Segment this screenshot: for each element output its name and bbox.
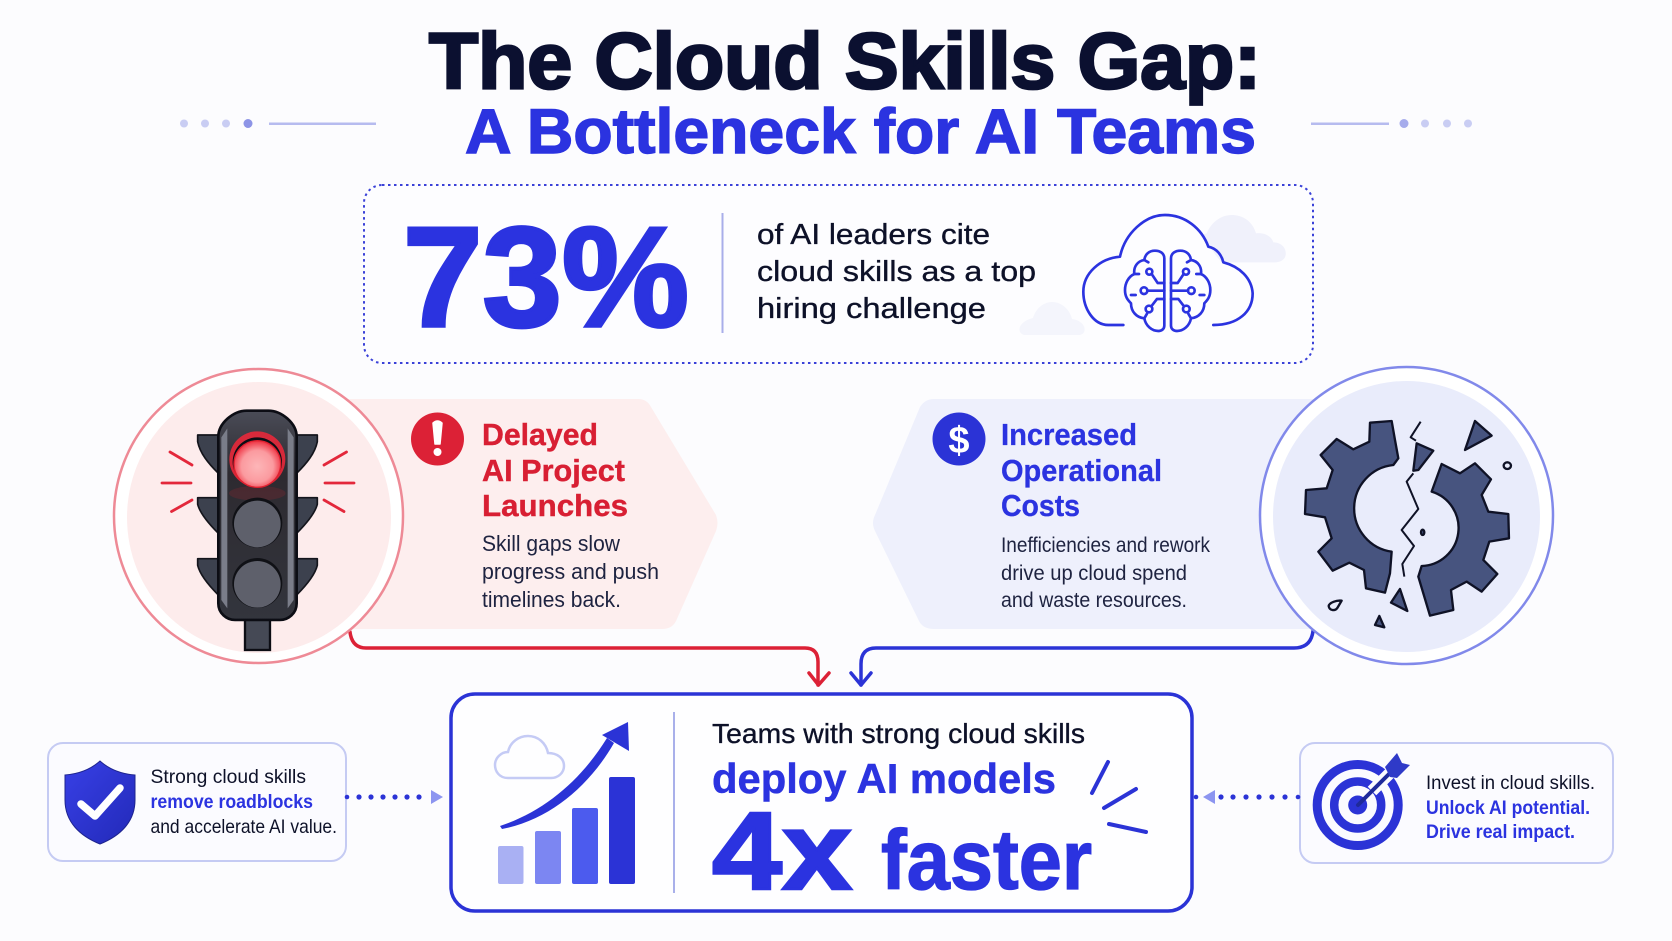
body text: timelines back. xyxy=(482,587,621,612)
result text: Teams with strong cloud skills xyxy=(712,718,1085,749)
result text xyxy=(712,718,1092,913)
icon: broken gear in circle xyxy=(1260,367,1553,664)
body text: progress and push xyxy=(482,559,659,584)
stat description: hiring challenge xyxy=(757,293,986,325)
callout text: Unlock AI potential. xyxy=(1426,797,1590,819)
icon: traffic light in circle xyxy=(114,369,403,663)
arrow: growth xyxy=(500,722,629,829)
icon: dollar: $ xyxy=(948,420,970,462)
heading xyxy=(1001,417,1162,523)
heading: Increased xyxy=(1001,417,1137,452)
arrow: blue connector xyxy=(851,631,1313,685)
icon: shield xyxy=(65,761,135,844)
heading: Launches xyxy=(482,488,628,523)
stat description: of AI leaders cite xyxy=(757,219,990,251)
result text: faster xyxy=(881,813,1092,907)
result text: deploy AI models xyxy=(712,755,1056,802)
icon: light rays xyxy=(162,452,354,512)
heading: AI Project xyxy=(482,453,625,488)
panel: 73% stat xyxy=(364,185,1313,363)
callout: remove roadblocks xyxy=(48,743,346,861)
arrow: red connector xyxy=(350,632,829,685)
title: The Cloud Skills Gap: xyxy=(429,16,1261,105)
panel: increased costs xyxy=(873,399,1330,629)
icon: spark lines xyxy=(1092,762,1146,832)
icon: dollar xyxy=(932,412,986,466)
icon: cloud with brain xyxy=(1083,215,1253,331)
panel: delayed launches xyxy=(340,399,718,629)
body text: Inefficiencies and rework xyxy=(1001,534,1210,557)
body text: Skill gaps slow xyxy=(482,531,620,556)
body text: drive up cloud spend xyxy=(1001,562,1187,585)
heading: Delayed xyxy=(482,417,598,452)
callout text xyxy=(150,766,337,838)
title xyxy=(429,16,1261,167)
title: A Bottleneck for AI Teams xyxy=(465,97,1256,167)
heading xyxy=(482,417,628,523)
callout text: and accelerate AI value. xyxy=(150,816,337,838)
icon: alert xyxy=(411,412,464,466)
chart: growth bars xyxy=(498,777,635,884)
icon: pale background clouds xyxy=(1020,215,1286,335)
callout text: remove roadblocks xyxy=(150,791,313,813)
callout text xyxy=(1426,772,1595,843)
stat number: 73% xyxy=(403,198,689,357)
callout text: Invest in cloud skills. xyxy=(1426,772,1595,794)
result text: 4x xyxy=(712,790,852,913)
icon: outline cloud xyxy=(495,736,564,778)
body text xyxy=(482,531,659,612)
icon: target xyxy=(1317,753,1410,846)
callout: invest in cloud skills xyxy=(1300,743,1613,863)
heading: Costs xyxy=(1001,488,1080,523)
stat description: cloud skills as a top xyxy=(757,256,1036,288)
callout text: Strong cloud skills xyxy=(150,766,306,788)
stat description xyxy=(757,219,1036,325)
callout text: Drive real impact. xyxy=(1426,821,1575,843)
body text xyxy=(1001,534,1210,612)
panel: main result xyxy=(451,694,1192,913)
body text: and waste resources. xyxy=(1001,589,1187,612)
arrow: left dotted xyxy=(345,790,443,804)
arrow: right dotted xyxy=(1194,790,1300,804)
heading: Operational xyxy=(1001,453,1162,488)
